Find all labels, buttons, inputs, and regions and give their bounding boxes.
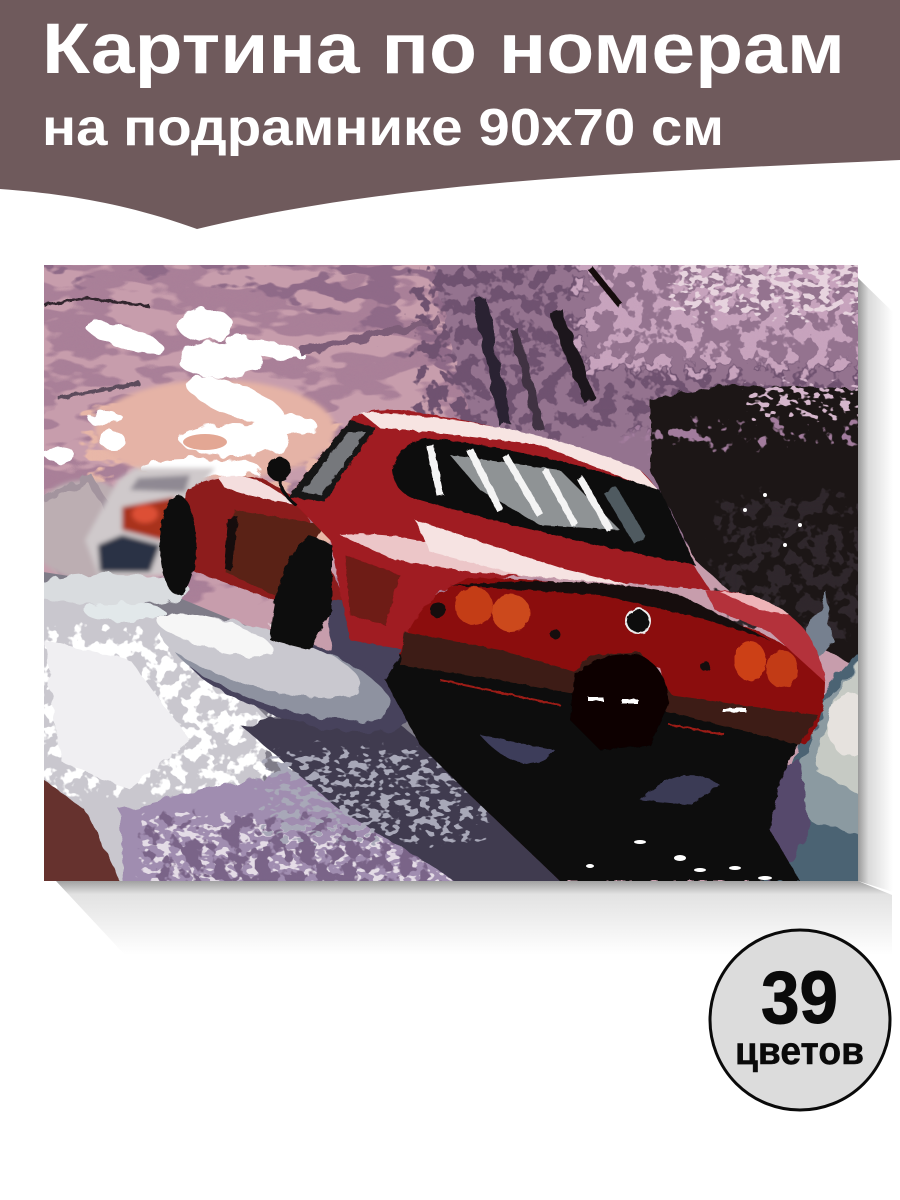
front wing bbox=[184, 476, 342, 600]
lower dark band bbox=[400, 632, 818, 745]
red trim lines bbox=[440, 680, 725, 735]
emblem bbox=[626, 609, 650, 633]
plate marks bbox=[588, 697, 746, 712]
reflectors bbox=[430, 602, 710, 671]
rear panel bbox=[400, 578, 825, 745]
plate recess bbox=[570, 654, 668, 750]
number of colours: 39 bbox=[761, 956, 838, 1039]
rear deck right bbox=[705, 590, 825, 682]
badge caption: цветов bbox=[735, 1030, 864, 1073]
tire smoke left bbox=[44, 571, 407, 734]
far car bbox=[85, 468, 215, 580]
painting: red car on a blossom road bbox=[44, 265, 858, 881]
right blossom canopy bbox=[434, 265, 858, 548]
header banner bbox=[0, 0, 900, 229]
wheels bbox=[160, 495, 196, 595]
mottled mauve layers bbox=[44, 265, 552, 604]
badge: 39 colours bbox=[710, 930, 890, 1110]
roof and flank bbox=[288, 410, 710, 650]
white sparks bbox=[586, 493, 802, 880]
title: Картина по номерам bbox=[42, 10, 845, 89]
canvas drop shadow bbox=[56, 278, 893, 955]
road bbox=[44, 572, 560, 881]
sky glare bbox=[44, 309, 317, 478]
tire smoke right bbox=[761, 590, 858, 881]
spoiler shadow bbox=[450, 582, 770, 640]
subtitle: на подрамнике 90х70 см bbox=[42, 99, 724, 157]
rear window bbox=[392, 438, 695, 565]
side window bbox=[288, 420, 376, 502]
car body bbox=[160, 410, 825, 750]
tail lights left bbox=[455, 587, 530, 632]
tail lights right bbox=[734, 641, 798, 688]
side mirror bbox=[267, 457, 296, 505]
blossom background bbox=[44, 265, 858, 881]
underside black and road shadow bbox=[384, 654, 800, 881]
